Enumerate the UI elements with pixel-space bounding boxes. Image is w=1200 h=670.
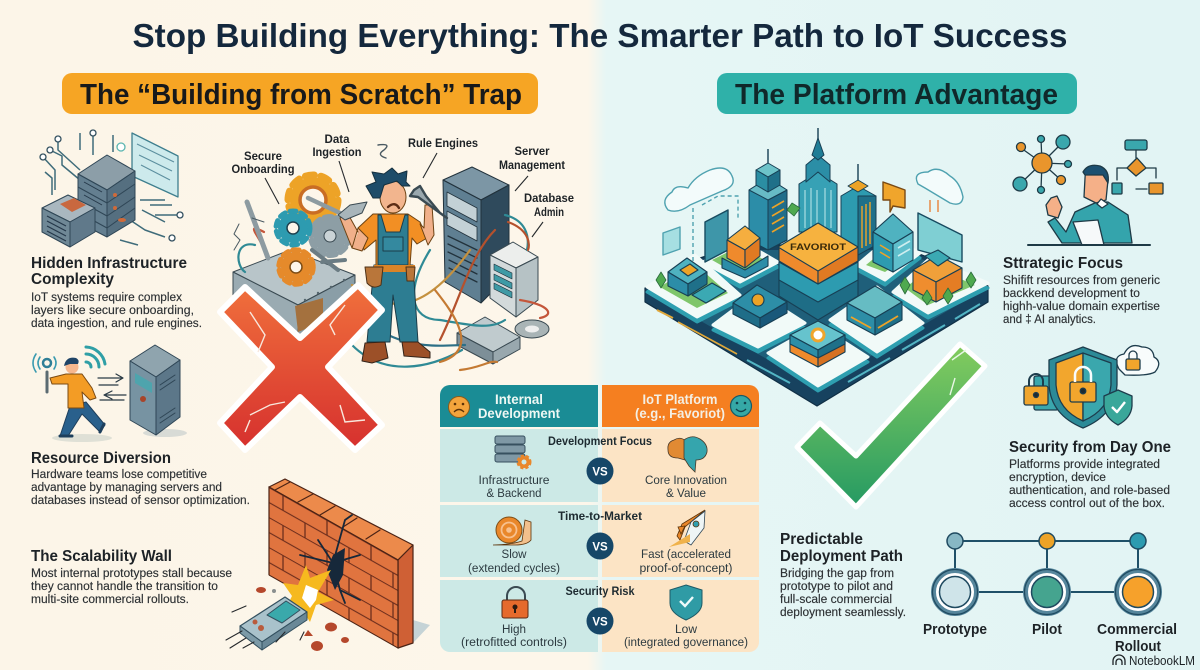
title: Stop Building Everything: The Smarter Path to IoT Success	[132, 18, 1068, 55]
server racks and device	[443, 167, 549, 364]
step: pilot	[1024, 570, 1070, 638]
row: time to market: proof-of-concept)	[640, 561, 732, 575]
row: security risk	[461, 585, 748, 649]
icon: cracked brick wall with crashed device	[226, 479, 430, 651]
heading: building from scratch trap: The “Building from Scratch” Trap	[80, 79, 522, 111]
table header: internal development	[440, 385, 598, 427]
callout labels on engineer illustration: Database	[524, 193, 574, 205]
text: predictable deployment path: Predictable	[780, 531, 863, 548]
icon: large red cross	[220, 285, 382, 450]
text: strategic focus: backkend development to	[1003, 286, 1140, 300]
text: resource diversion: advantage by managing servers and	[31, 480, 222, 494]
callout labels on engineer illustration: Data	[324, 134, 350, 146]
table header: internal development: Development	[478, 406, 560, 421]
text: hidden infrastructure complexity: layers like secure onboarding,	[31, 303, 194, 317]
callout labels on engineer illustration: Rule Engines	[408, 138, 478, 150]
text: scalability wall	[31, 548, 232, 606]
step: prototype	[923, 570, 987, 638]
icon: person running to server	[33, 345, 187, 442]
callout labels on engineer illustration: Onboarding	[232, 164, 294, 176]
illustration: overwhelmed engineer with gears and servers	[233, 145, 549, 370]
row: development focus: & Value	[666, 486, 706, 500]
row: security risk: Security Risk	[566, 586, 635, 598]
text: predictable deployment path	[780, 531, 906, 619]
text: security from day one: Platforms provide integrated	[1009, 457, 1160, 471]
icon: server stack with circuits	[40, 130, 183, 247]
text: resource diversion: databases instead of sensor optimization.	[31, 493, 250, 507]
gears	[276, 175, 349, 284]
text: predictable deployment path: prototype to pilot and	[780, 579, 893, 593]
icon: security shield and locks	[1024, 346, 1159, 428]
text: scalability wall: Most internal prototypes stall because	[31, 566, 232, 580]
icon: large green check mark	[797, 344, 985, 507]
VS badges	[586, 458, 614, 634]
step: commercial rollout	[1097, 570, 1177, 655]
callout labels on engineer illustration: Management	[499, 160, 565, 172]
illustration: favoriot smart city platform	[645, 128, 988, 406]
text: strategic focus: Shifift resources from generic	[1003, 273, 1160, 287]
row: security risk: Low	[675, 622, 697, 636]
text: security from day one: access control out of the box.	[1009, 496, 1165, 510]
deployment path diagram	[923, 533, 1177, 655]
row: time to market: Slow	[502, 547, 527, 561]
icon: strategist with network and flowchart	[1013, 135, 1163, 245]
step: commercial rollout: Commercial	[1097, 622, 1177, 638]
text: security from day one: Security from Day One	[1009, 439, 1171, 456]
text: strategic focus	[1003, 255, 1160, 326]
text: scalability wall: The Scalability Wall	[31, 548, 172, 565]
trees	[656, 203, 976, 305]
text: security from day one: authentication, and role-based	[1009, 483, 1170, 497]
row: time to market: Time-to-Market	[558, 511, 642, 523]
text: strategic focus: Sttrategic Focus	[1003, 255, 1123, 272]
text: hidden infrastructure complexity: data ingestion, and rule engines.	[31, 316, 202, 330]
row: development focus: Core Innovation	[645, 473, 727, 487]
isometric buildings	[668, 214, 962, 367]
table header: iot platform: (e.g., Favoriot)	[635, 406, 725, 421]
table header: internal development: Internal	[495, 392, 543, 407]
text: resource diversion	[31, 450, 250, 507]
central favoriot block: FAVORIOT	[790, 242, 846, 253]
text: hidden infrastructure complexity	[31, 255, 202, 330]
engineer	[308, 168, 447, 363]
heading: platform advantage: The Platform Advantage	[735, 79, 1058, 111]
row: time to market: (extended cycles)	[468, 561, 560, 575]
row: development focus: Development Focus	[548, 436, 652, 448]
text: predictable deployment path: deployment seamlessly.	[780, 605, 906, 619]
callout labels on engineer illustration: Server	[514, 146, 550, 158]
comparison table	[440, 385, 759, 652]
row: security risk: (retrofitted controls)	[461, 635, 567, 649]
callout labels on engineer illustration: Secure	[244, 151, 282, 163]
step: pilot: Pilot	[1032, 622, 1062, 638]
VS badges: VS	[592, 616, 608, 628]
text: resource diversion: Hardware teams lose competitive	[31, 467, 207, 481]
text: hidden infrastructure complexity: Hidden Infrastructure	[31, 255, 187, 272]
VS badges: VS	[592, 466, 608, 478]
row: development focus: Infrastructure	[478, 473, 550, 487]
row: security risk: High	[502, 622, 526, 636]
text: security from day one: encryption, device	[1009, 470, 1106, 484]
text: resource diversion: Resource Diversion	[31, 450, 171, 467]
table header: iot platform	[602, 385, 759, 427]
text: predictable deployment path: full-scale commercial	[780, 592, 892, 606]
callout labels on engineer illustration	[232, 134, 574, 237]
text: predictable deployment path: Deployment Path	[780, 548, 903, 565]
metal box	[233, 250, 355, 345]
text: scalability wall: multi-site commercial rollouts.	[31, 592, 189, 606]
text: strategic focus: and ‡ AI analytics.	[1003, 312, 1096, 326]
text: predictable deployment path: Bridging the gap from	[780, 566, 894, 580]
step: commercial rollout: Rollout	[1115, 639, 1161, 655]
callout labels on engineer illustration: Ingestion	[312, 147, 362, 159]
wires	[238, 215, 548, 370]
platform base	[645, 245, 988, 406]
clouds and signs	[663, 168, 963, 262]
row: time to market: Fast (accelerated	[641, 547, 731, 561]
central favoriot block	[778, 223, 858, 320]
text: security from day one	[1009, 439, 1171, 510]
table row backgrounds	[440, 429, 759, 652]
text: strategic focus: highh-value domain expertise	[1003, 299, 1160, 313]
VS badges: VS	[592, 542, 608, 554]
city towers	[749, 128, 876, 255]
text: hidden infrastructure complexity: Complexity	[31, 271, 114, 288]
row: development focus	[478, 436, 727, 500]
row: development focus: & Backend	[486, 486, 542, 500]
row: time to market	[468, 510, 732, 575]
table header: iot platform: IoT Platform	[642, 392, 718, 407]
text: scalability wall: they cannot handle the transition to	[31, 579, 218, 593]
callout labels on engineer illustration: Admin	[534, 207, 564, 219]
step: prototype: Prototype	[923, 622, 987, 638]
row: security risk: (integrated governance)	[624, 635, 748, 649]
text: hidden infrastructure complexity: IoT systems require complex	[31, 290, 183, 304]
platform tiles	[647, 237, 988, 391]
